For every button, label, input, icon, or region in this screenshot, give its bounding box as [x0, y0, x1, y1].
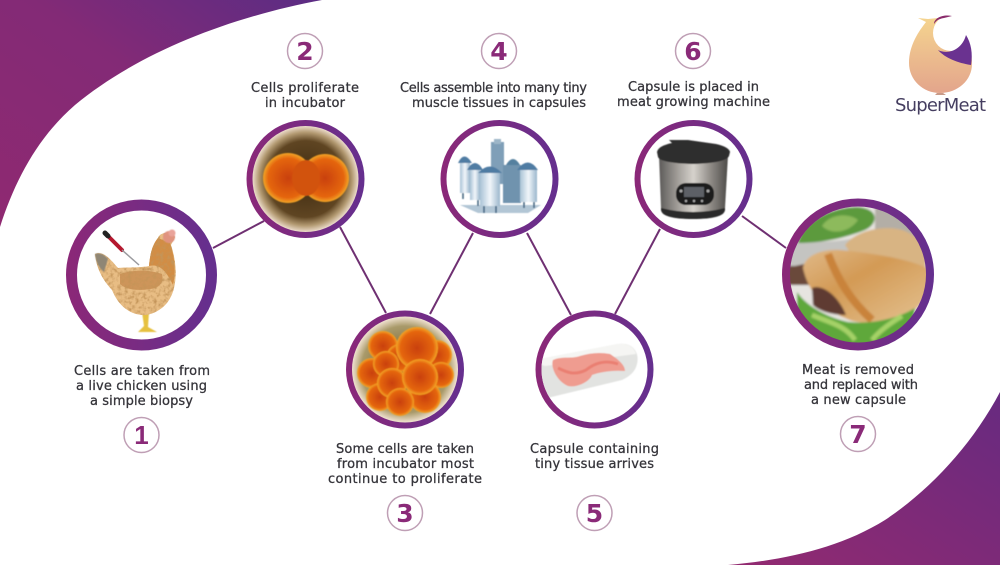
text: step 7 caption: a new capsule: [811, 393, 906, 408]
icon: cooked chicken on lettuce: [780, 200, 940, 350]
text: step 4 caption: muscle tissues in capsules: [412, 96, 586, 111]
step 2 panel: [246, 34, 364, 238]
step 3 panel: [328, 310, 482, 530]
number 1: [124, 418, 159, 452]
number 5: [577, 496, 612, 530]
number 4: [482, 34, 516, 68]
text: step 7 caption: and replaced with: [804, 378, 918, 393]
number 6: [676, 34, 710, 68]
number 2: 2: [296, 37, 314, 66]
text: step 3 caption: [328, 442, 482, 487]
text: step 7 caption: [802, 363, 918, 408]
text: step 6 caption: meat growing machine: [617, 95, 770, 110]
number 1: 1: [134, 420, 149, 450]
number 4: 4: [490, 37, 508, 66]
step 6 panel: [617, 34, 770, 235]
background swoosh: top left: [0, 0, 322, 227]
text: step 3 caption: Some cells are taken: [336, 442, 474, 457]
text: step 3 caption: from incubator most: [337, 457, 474, 472]
step 5 panel: [530, 314, 659, 530]
text: SuperMeat wordmark: SuperMeat: [895, 95, 986, 116]
icon: dividing cell: [246, 120, 364, 238]
text: step 5 caption: [530, 442, 659, 472]
number 5: 5: [586, 499, 603, 528]
number 3: 3: [396, 499, 414, 528]
logo: SuperMeat: [895, 15, 986, 116]
text: step 4 caption: [400, 81, 587, 111]
text: step 2 caption: in incubator: [265, 96, 346, 111]
text: step 3 caption: continue to proliferate: [328, 472, 482, 487]
text: step 4 caption: Cells assemble into many tiny: [400, 81, 587, 96]
step 7 panel: [780, 200, 940, 452]
text: step 7 caption: Meat is removed: [802, 363, 914, 378]
text: step 6 caption: Capsule is placed in: [628, 80, 759, 95]
number 7: [840, 416, 876, 452]
step 4 panel: [400, 34, 587, 235]
text: step 5 caption: tiny tissue arrives: [535, 457, 654, 472]
text: step 1 caption: a simple biopsy: [90, 394, 193, 409]
number 3: [388, 496, 422, 530]
icon: chicken with syringe: [72, 205, 212, 345]
text: step 2 caption: [251, 81, 359, 111]
text: step 2 caption: Cells proliferate: [251, 81, 359, 96]
icon: hen mark: [909, 15, 972, 95]
icon: bioreactor tanks: [444, 123, 556, 235]
text: step 1 caption: a live chicken using: [76, 379, 207, 394]
connector lines: [213, 216, 786, 315]
number 2: [288, 34, 322, 68]
icon: proliferating cell cluster: [346, 310, 464, 428]
number 7: 7: [849, 420, 867, 449]
icon: meat growing machine: [638, 123, 750, 235]
number 6: 6: [684, 37, 702, 66]
text: step 1 caption: Cells are taken from: [74, 364, 210, 379]
text: step 1 caption: [74, 364, 210, 409]
step 1 panel: [72, 205, 212, 452]
text: step 5 caption: Capsule containing: [530, 442, 659, 457]
text: step 6 caption: [617, 80, 770, 110]
background swoosh: bottom right: [728, 392, 1000, 565]
icon: capsule with tissue: [530, 314, 650, 426]
